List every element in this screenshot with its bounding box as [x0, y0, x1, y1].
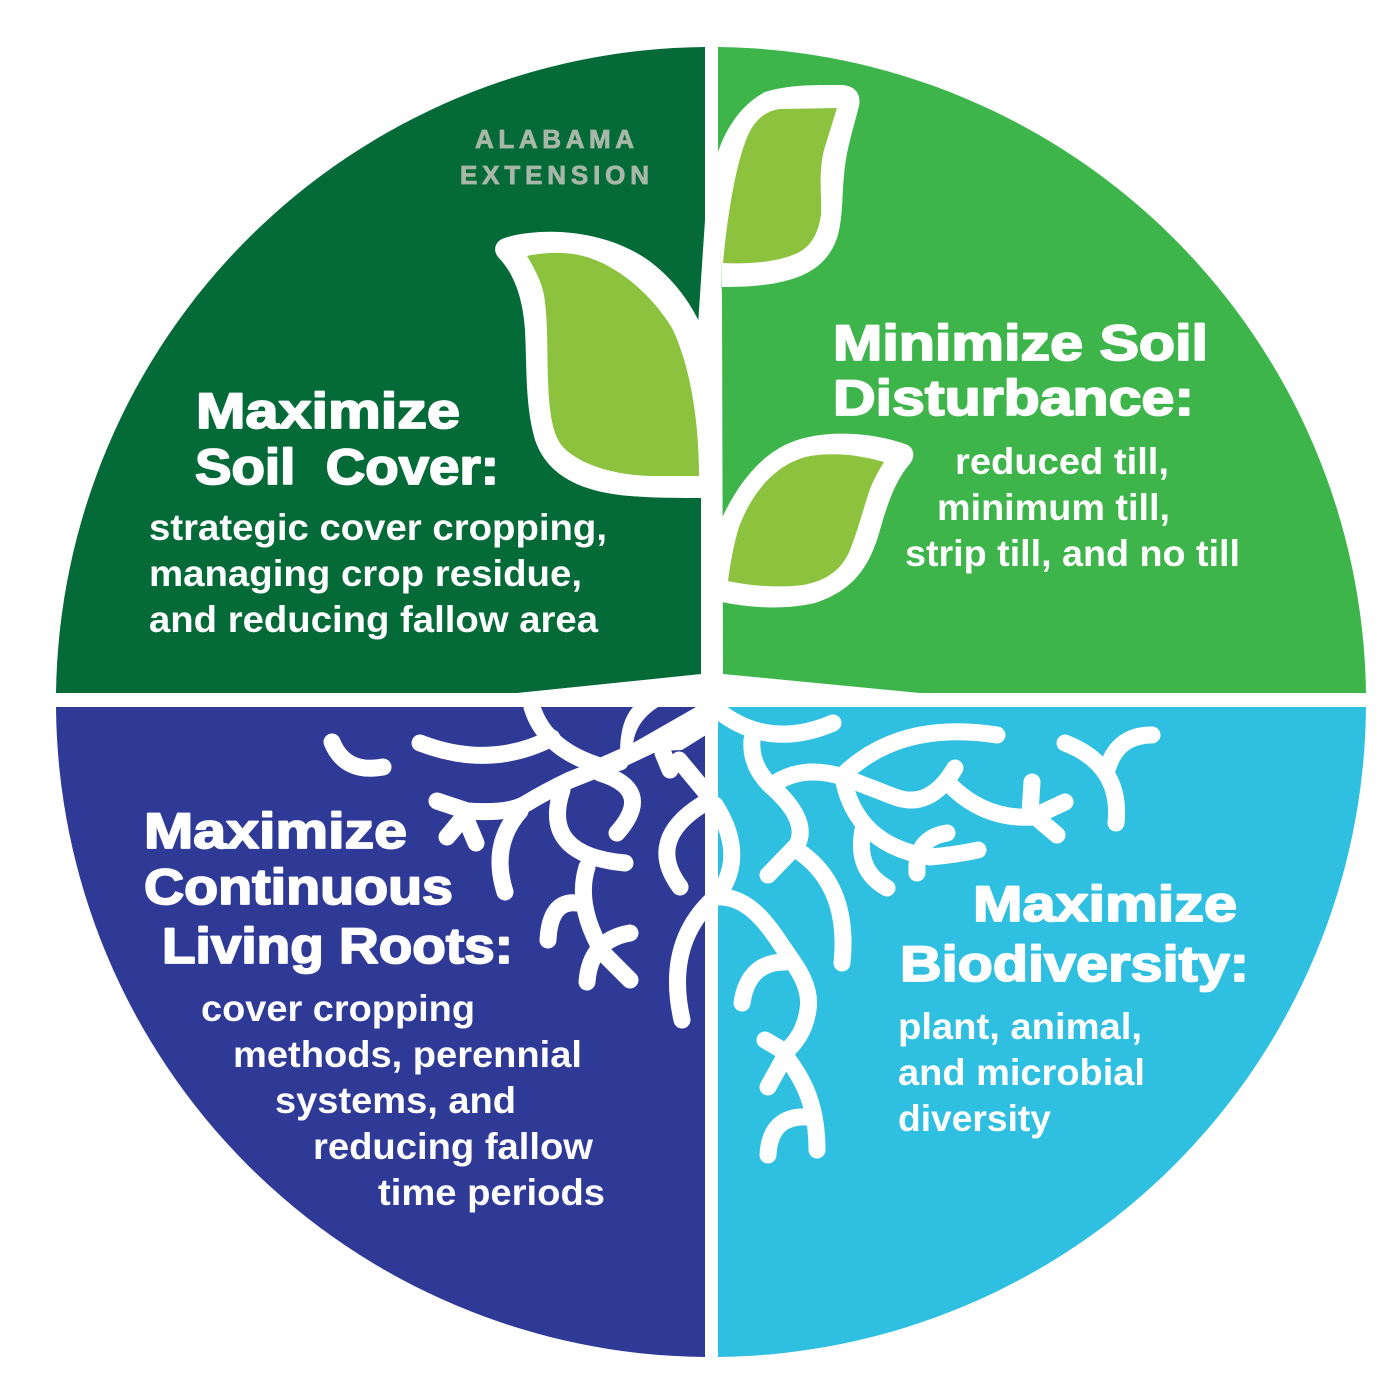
- heading: maximize continuous living roots: [144, 803, 513, 974]
- text: soil disturbance details: [905, 441, 1240, 574]
- text: soil cover details: and reducing fallow area: [149, 599, 598, 640]
- heading: minimize soil disturbance: Disturbance:: [833, 370, 1194, 426]
- panel: living roots quadrant: [56, 707, 705, 1357]
- text: Alabama Extension logo: EXTENSION: [460, 160, 649, 190]
- heading: maximize biodiversity: [900, 876, 1249, 992]
- heading: maximize continuous living roots: Maximize: [144, 803, 407, 859]
- text: biodiversity details: plant, animal,: [898, 1006, 1142, 1047]
- text: Alabama Extension logo: ALABAMA: [475, 124, 634, 154]
- text: soil disturbance details: strip till, and no till: [905, 533, 1240, 574]
- text: living roots details: cover cropping: [201, 988, 475, 1029]
- heading: minimize soil disturbance: Minimize Soil: [833, 315, 1208, 371]
- heading: minimize soil disturbance: [833, 315, 1208, 426]
- text: living roots details: reducing fallow: [313, 1126, 593, 1167]
- text: biodiversity details: and microbial: [898, 1052, 1145, 1093]
- heading: maximize continuous living roots: Living Roots:: [162, 918, 513, 974]
- icon: large left leaf: [495, 232, 703, 498]
- icon: top right leaf: [717, 85, 859, 287]
- text: soil cover details: managing crop residue,: [149, 553, 582, 594]
- heading: maximize continuous living roots: Continuous: [144, 859, 453, 915]
- text: biodiversity details: diversity: [898, 1098, 1051, 1139]
- text: soil cover details: strategic cover cropping,: [149, 507, 607, 548]
- panel: biodiversity quadrant: [718, 707, 1366, 1357]
- illustration: left roots: [332, 707, 712, 1020]
- text: living roots details: methods, perennial: [233, 1034, 582, 1075]
- text: living roots details: time periods: [378, 1172, 605, 1213]
- text: Alabama Extension logo: [460, 124, 649, 190]
- icon: lower right leaf: [722, 434, 913, 607]
- illustration: right roots: [715, 712, 1152, 1155]
- text: biodiversity details: [898, 1006, 1145, 1139]
- text: living roots details: systems, and: [275, 1080, 516, 1121]
- heading: maximize biodiversity: Biodiversity:: [900, 936, 1249, 992]
- text: living roots details: [201, 988, 605, 1213]
- text: soil disturbance details: minimum till,: [937, 487, 1170, 528]
- text: soil disturbance details: reduced till,: [955, 441, 1169, 482]
- text: soil cover details: [149, 507, 607, 640]
- heading: maximize biodiversity: Maximize: [973, 876, 1237, 932]
- heading: maximize soil cover: Soil Cover:: [195, 439, 499, 495]
- heading: maximize soil cover: Maximize: [196, 383, 460, 439]
- illustration: plant leaves: [495, 85, 913, 607]
- heading: maximize soil cover: [195, 383, 499, 495]
- panel: soil cover quadrant: [56, 47, 705, 693]
- panel: soil disturbance quadrant: [718, 47, 1366, 693]
